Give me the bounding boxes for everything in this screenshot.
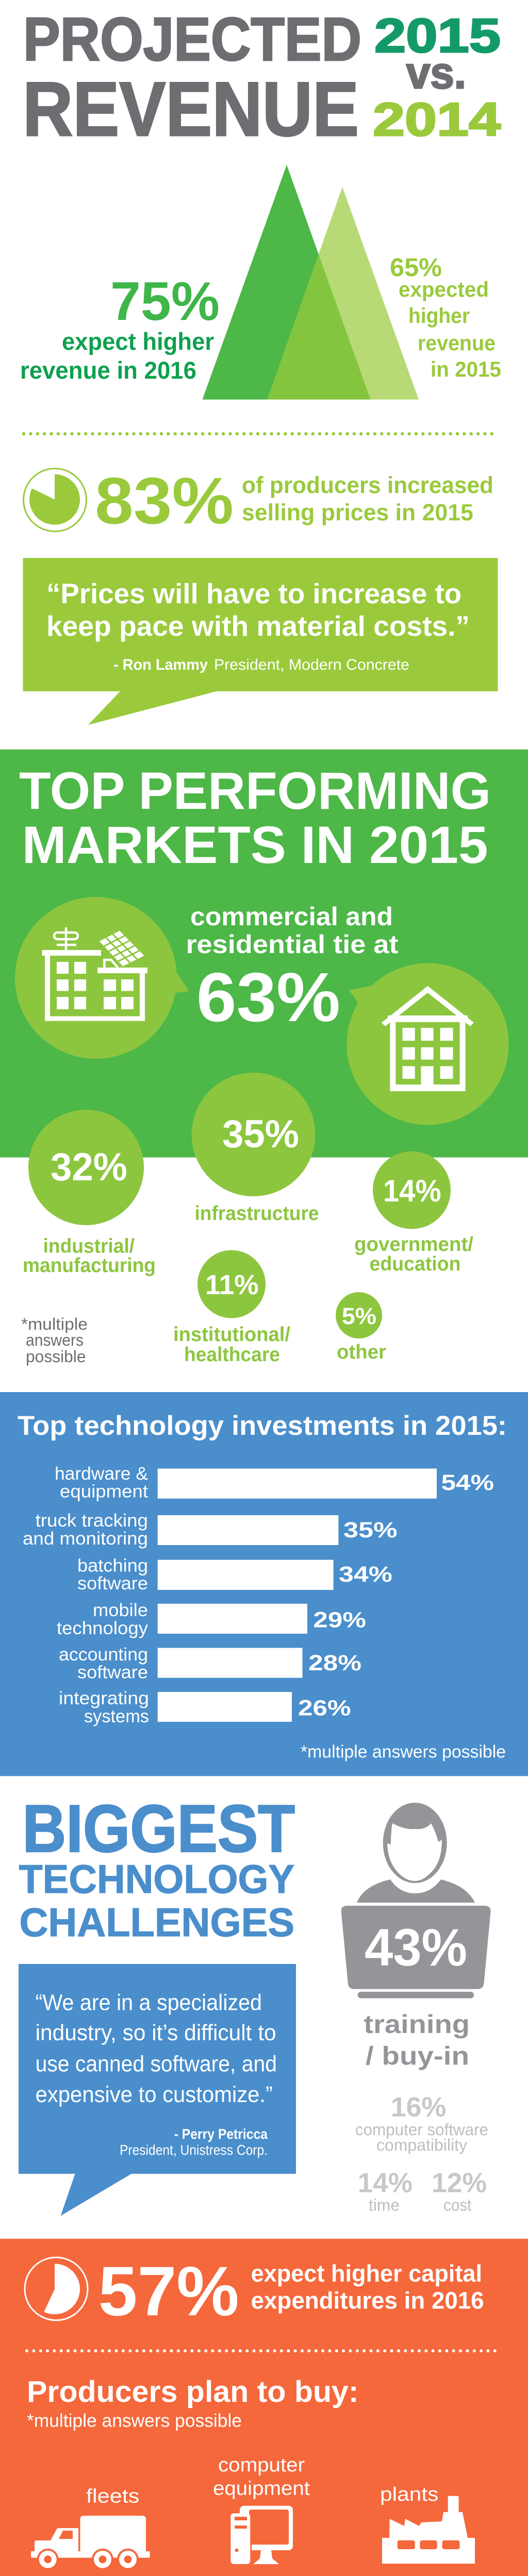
stat: 14% government education <box>354 1151 473 1275</box>
callout: Ron Lammy quote: - Ron Lammy <box>113 656 208 673</box>
bar chart: technology investments: hardware & <box>55 1464 148 1484</box>
footnote: multiple answers possible: possible <box>26 1347 86 1366</box>
callout: Perry Petricca quote <box>19 1964 296 2216</box>
panel: top technology investments background <box>0 1392 528 1776</box>
icon: commercial buildings bubble <box>15 897 189 1059</box>
stat: 12% cost <box>432 2167 487 2214</box>
callout: Perry Petricca quote: industry, so it’s difficult to <box>36 2020 276 2045</box>
heading: biggest technology challenges <box>19 1791 295 1945</box>
icon: fleets truck 65%: fleets <box>86 2485 139 2507</box>
text block: training / buy-in: training <box>364 2010 470 2039</box>
heading: top performing markets in 2015 <box>19 761 491 874</box>
bar chart: technology investments: 34% <box>339 1562 392 1587</box>
bar chart: technology investments: 35% <box>343 1518 398 1543</box>
heading: producers plan to buy <box>27 2375 359 2431</box>
title: projected revenue 2015 vs. 2014 <box>23 5 501 152</box>
text block: commercial and residential tie at 63% <box>186 902 399 1036</box>
icon: plants factory 60%: plants <box>380 2484 438 2505</box>
stat: 32% industrial manufacturing: industrial/ <box>43 1235 135 1258</box>
icon: person at laptop with 43%: 43% <box>365 1918 467 1977</box>
text block: 65% expected higher revenue in 2015: 65% <box>390 253 442 282</box>
stat: 32% industrial manufacturing: 32% <box>51 1145 127 1189</box>
stat: 35% infrastructure: 35% <box>222 1112 299 1156</box>
icon: plants factory 60% <box>380 2484 475 2576</box>
text block: 65% expected higher revenue in 2015: in 2015 <box>431 357 501 381</box>
bar chart: technology investments: and monitoring <box>23 1529 148 1549</box>
stat: 32% industrial manufacturing: manufacturing <box>23 1255 156 1277</box>
stat: 83% of producers increased selling prices <box>95 464 493 538</box>
stat: 57% expect higher capital expenditures: 57% <box>98 2252 239 2330</box>
stat: 5% other: other <box>337 1341 386 1363</box>
title: projected revenue 2015 vs. 2014: vs. <box>406 48 466 98</box>
bar chart: technology investments: 54% <box>441 1470 494 1495</box>
callout: Ron Lammy quote: keep pace with material costs.” <box>46 610 470 642</box>
footnote: multiple answers possible: answers <box>26 1331 84 1349</box>
heading: biggest technology challenges: BIGGEST <box>23 1791 295 1866</box>
stat: 83% of producers increased selling prices: 83% <box>95 464 234 538</box>
text block: 75% expect higher revenue in 2016: 75% <box>110 271 220 332</box>
title: projected revenue 2015 vs. 2014: 2015 <box>374 9 501 62</box>
stat: 16% computer software compatibility: compatibility <box>376 2136 467 2155</box>
stat: 12% cost: cost <box>443 2196 472 2214</box>
icon: computer equipment 63%: computer <box>218 2454 305 2476</box>
callout: Ron Lammy quote <box>23 558 498 725</box>
heading: producers plan to buy: *multiple answers possible <box>27 2410 242 2431</box>
icon: 83 percent pie <box>24 468 87 531</box>
panel: capital expenditures background <box>0 2239 528 2576</box>
callout: Ron Lammy quote: President, Modern Concrete <box>214 656 409 673</box>
heading: biggest technology challenges: CHALLENGES <box>20 1900 294 1945</box>
icon: computer equipment 63% <box>213 2454 310 2576</box>
stat: 83% of producers increased selling prices: of producers increased <box>242 472 493 498</box>
text block: training / buy-in: / buy-in <box>366 2042 469 2071</box>
stat: 32% industrial manufacturing <box>23 1110 156 1277</box>
stat: 83% of producers increased selling prices: selling prices in 2015 <box>242 499 473 526</box>
stat: 11% institutional healthcare: institutional/ <box>173 1324 290 1346</box>
text block: 65% expected higher revenue in 2015: expected <box>399 277 489 301</box>
title: projected revenue 2015 vs. 2014: PROJECTED <box>23 5 361 74</box>
text block: 75% expect higher revenue in 2016: expect higher <box>62 328 214 355</box>
title: projected revenue 2015 vs. 2014: REVENUE <box>23 66 359 152</box>
bar chart: technology investments: 26% <box>298 1696 351 1721</box>
callout: Perry Petricca quote: - Perry Petricca <box>174 2126 268 2142</box>
title: projected revenue 2015 vs. 2014: 2014 <box>373 94 501 146</box>
bar chart: technology investments: truck tracking <box>36 1511 148 1531</box>
footnote: multiple answers possible <box>21 1315 88 1366</box>
stat: 35% infrastructure <box>192 1073 319 1225</box>
text block: 65% expected higher revenue in 2015: revenue <box>418 331 496 355</box>
bar chart: technology investments: integrating <box>59 1688 149 1708</box>
bar chart: technology investments <box>23 1464 494 1726</box>
bar chart: technology investments: software <box>77 1573 148 1594</box>
chart: overlapping revenue triangles <box>202 165 419 400</box>
stat: 35% infrastructure: infrastructure <box>195 1202 319 1225</box>
bar chart: technology investments: technology <box>57 1618 148 1638</box>
bar chart: technology investments: mobile <box>93 1600 148 1620</box>
stat: 5% other: 5% <box>342 1303 376 1329</box>
bar chart: technology investments: 29% <box>313 1608 366 1633</box>
heading: top performing markets in 2015: TOP PERFORMING <box>19 761 491 820</box>
stat: 12% cost: 12% <box>432 2167 487 2198</box>
footnote: multiple answers possible: *multiple answers possible <box>301 1742 506 1762</box>
stat: 14% time: time <box>369 2196 400 2214</box>
callout: Perry Petricca quote: “We are in a specialized <box>36 1990 262 2015</box>
bar chart: technology investments: accounting <box>59 1645 148 1665</box>
heading: top technology investments in 2015: Top technology investments in 2015: <box>18 1411 507 1441</box>
stat: 14% government education: government/ <box>354 1233 473 1256</box>
icon: person at laptop with 43% <box>341 1801 491 1998</box>
stat: 57% expect higher capital expenditures: expenditures in 2016 <box>251 2287 484 2314</box>
stat: 11% institutional healthcare <box>173 1250 290 1366</box>
bar chart: technology investments: 28% <box>308 1651 361 1675</box>
stat: 14% time: 14% <box>358 2167 412 2198</box>
text block: commercial and residential tie at 63%: residential tie at <box>186 930 399 959</box>
stat: 5% other <box>336 1292 386 1363</box>
stat: 11% institutional healthcare: healthcare <box>184 1344 280 1366</box>
stat: 14% time <box>358 2167 412 2214</box>
callout: Perry Petricca quote: use canned software, and <box>36 2051 277 2076</box>
stat: 11% institutional healthcare: 11% <box>205 1269 259 1300</box>
stat: 57% expect higher capital expenditures <box>98 2252 484 2330</box>
stat: 16% computer software compatibility: 16% <box>391 2092 446 2123</box>
icon: fleets truck 65% <box>31 2485 150 2576</box>
callout: Perry Petricca quote: expensive to customize.” <box>36 2082 273 2107</box>
bar chart: technology investments: systems <box>84 1706 149 1726</box>
text block: 65% expected higher revenue in 2015: higher <box>408 303 470 328</box>
panel: top performing markets background <box>0 750 528 1158</box>
callout: Perry Petricca quote: President, Unistress Corp. <box>120 2142 268 2158</box>
stat: 16% computer software compatibility: computer software <box>355 2120 488 2139</box>
footnote: multiple answers possible: *multiple <box>21 1315 88 1333</box>
stat: 14% government education: education <box>369 1253 461 1275</box>
stat: 16% computer software compatibility <box>355 2092 488 2155</box>
text block: commercial and residential tie at 63%: 63% <box>196 958 340 1036</box>
text block: 75% expect higher revenue in 2016: revenue in 2016 <box>20 357 196 384</box>
bar chart: technology investments: software <box>77 1663 148 1683</box>
heading: producers plan to buy: Producers plan to buy: <box>27 2375 359 2409</box>
heading: top performing markets in 2015: MARKETS IN 2015 <box>22 816 488 874</box>
text block: 75% expect higher revenue in 2016 <box>20 271 220 384</box>
bar chart: technology investments: equipment <box>60 1482 148 1502</box>
stat: 14% government education: 14% <box>383 1174 441 1208</box>
text block: commercial and residential tie at 63%: commercial and <box>190 902 393 931</box>
text block: training / buy-in <box>364 2010 470 2071</box>
callout: Ron Lammy quote: “Prices will have to increase to <box>46 578 461 609</box>
text block: 65% expected higher revenue in 2015 <box>390 253 501 381</box>
icon: computer equipment 63%: equipment <box>213 2478 310 2500</box>
heading: biggest technology challenges: TECHNOLOGY <box>19 1856 294 1902</box>
icon: residential house bubble <box>346 963 508 1125</box>
icon: 57 percent pie <box>25 2258 88 2320</box>
stat: 57% expect higher capital expenditures: expect higher capital <box>251 2260 482 2287</box>
bar chart: technology investments: batching <box>77 1556 148 1575</box>
